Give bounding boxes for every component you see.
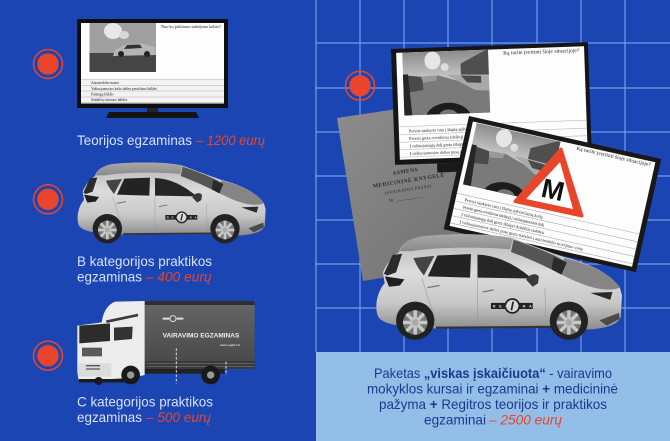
label: C category exam price: egzaminas <box>77 409 142 425</box>
marker: B category <box>34 185 62 214</box>
image: back monitor with question: Ką turite įvertinti šioje situacijoje? <box>503 48 580 57</box>
answer options: Važiuojamosios kelio dalies paviršiaus būklės <box>91 87 157 91</box>
image: B category car: REG TRA <box>167 216 197 220</box>
package description text: mokyklos kursai ir egzaminai + medicininė <box>367 380 618 396</box>
image: back monitor with question <box>391 42 592 174</box>
answer options <box>81 80 224 103</box>
background grid <box>316 0 670 352</box>
package description text: Paketas „viskas įskaičiuota“ - vairavimo <box>374 365 612 381</box>
image: front tablet with question <box>444 116 661 272</box>
answer options: Stabdžių sistemos būklės <box>91 98 128 102</box>
label: theory exam price: – 1200 eurų <box>195 132 265 148</box>
question photo <box>90 23 156 72</box>
answer options: Padangų būklės <box>91 92 114 96</box>
image: package car: REG TRA <box>493 304 532 309</box>
image: medical booklet: (SVEIKATOS PASAS) <box>384 183 432 195</box>
image: back monitor with question: Pereisi greta covidavus (dešinį) į važiuojamosios dalį <box>409 133 502 141</box>
image: C category truck <box>77 301 255 385</box>
label: B category exam price <box>77 253 212 284</box>
package description text: pažyma + Regitros teorijos ir praktikos <box>379 396 607 412</box>
image: B category car <box>78 162 266 243</box>
image: package car <box>376 234 622 340</box>
image: medical booklet: Nr. ____________ <box>388 193 423 203</box>
question text: Nuo ko priklauso stabdymo kelias? <box>161 24 221 29</box>
package description text: egzaminai <box>424 412 486 428</box>
image: back monitor with question: Pereisi sankarto ratu į šlapią apšviečiamą kelią <box>409 126 489 133</box>
image: front tablet with question: Pereisi sankarto ratu į šlapią apšviečiamą kelią <box>464 197 543 219</box>
label: C category exam price: – 500 eurų <box>145 409 211 425</box>
label: B category exam price: – 400 eurų <box>145 268 212 284</box>
image: medical booklet: MEDICININĖ KNYGELĖ <box>372 171 445 190</box>
image: front tablet with question: Į važiuojamąją dalį greta išlaipti Arūdžiai stabdyti <box>461 212 546 235</box>
label: C category exam price: C kategorijos praktikos <box>77 394 213 410</box>
truck lettering: VAIRAVIMO EGZAMINAS <box>163 332 240 339</box>
label: C category exam price <box>77 394 213 425</box>
icon: M warning triangle <box>515 149 582 216</box>
image: back monitor with question: Į važiuojamosios dalies pusę greta stabdyti <box>410 148 484 156</box>
image: back monitor with question: Į važiuojamąją dalį greta išlaipti Arūdžiai <box>409 141 481 148</box>
label: theory exam price: Teorijos egzaminas <box>77 132 192 148</box>
image: front tablet with question: Ką turite įvertinti šioje situacijoje? <box>576 146 652 168</box>
icon: TV monitor with theory question <box>77 19 228 118</box>
package description text: – 2500 eurų <box>488 412 562 428</box>
icon: M warning triangle: M <box>539 173 567 207</box>
image: front tablet with question: Pereisi greta covidavus (dešinį) į važiuojamosios dalį <box>462 204 545 228</box>
marker: C category <box>34 341 62 370</box>
label: B category exam price: B kategorijos praktikos <box>77 253 212 269</box>
image: C category truck: www.regitra.lt <box>219 343 240 347</box>
image: medical booklet <box>337 101 490 281</box>
image: medical booklet: ASMENS <box>392 167 419 177</box>
panel: package description <box>316 352 670 441</box>
answer options: Automobilio masės <box>91 81 120 85</box>
marker: theory exam <box>34 50 62 78</box>
package description text <box>367 365 618 428</box>
label: B category exam price: egzaminas <box>77 268 142 284</box>
marker: package <box>346 71 374 100</box>
image: front tablet with question: Į važiuojamosios dalies pusę greta stabdyti į automobilio stovėjimo vietą <box>459 219 583 251</box>
label: theory exam price <box>77 132 265 148</box>
